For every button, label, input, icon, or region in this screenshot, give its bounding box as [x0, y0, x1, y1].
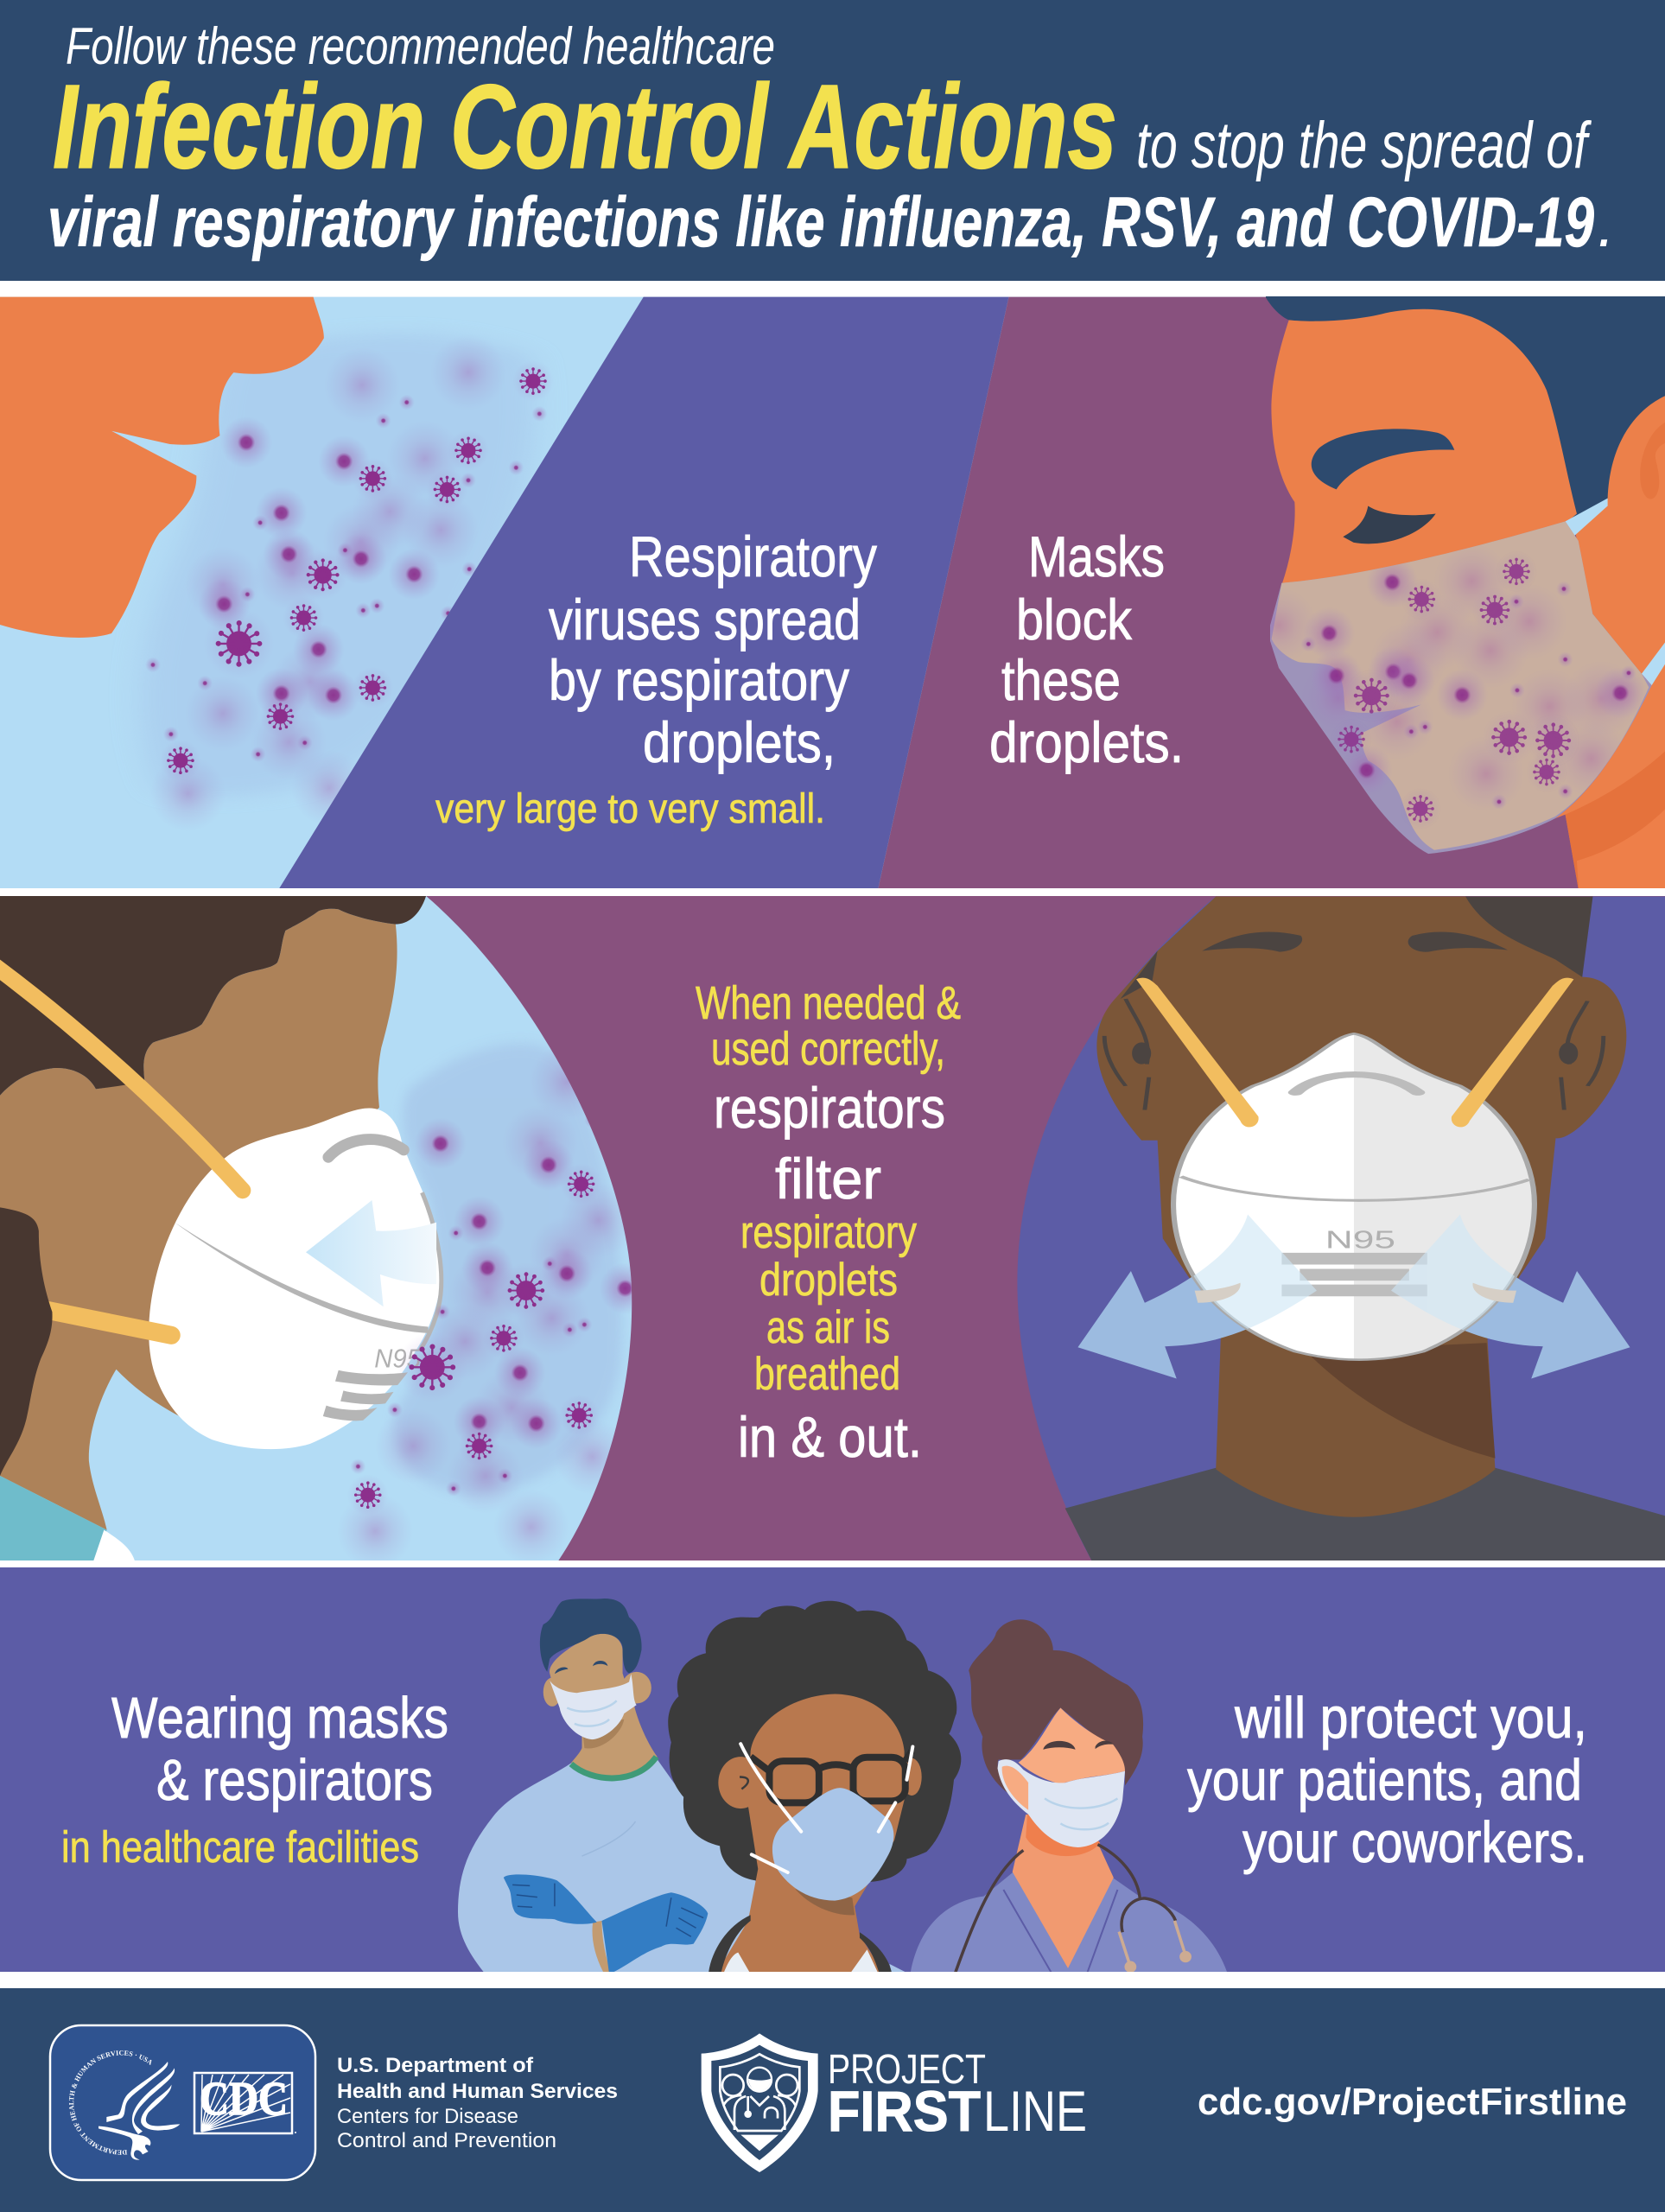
- text: respiratory viruses: Respiratory: [629, 524, 877, 588]
- icon: front-view N95 respirator: [1077, 1033, 1630, 1378]
- text: Project Firstline wordmark: FIRST: [828, 2079, 981, 2143]
- icon: worker three: [910, 1619, 1228, 1974]
- text: wearing masks: [111, 1686, 448, 1813]
- icon: HHS and CDC logo: DEPARTMENT OF HEALTH & HUMAN SERVICES · USA: [69, 2050, 152, 2155]
- icon: droplet haze: [337, 1044, 636, 1569]
- text: will protect you: will protect you,: [1234, 1686, 1587, 1751]
- panel: respirators filter droplets: [0, 894, 1665, 1569]
- text: department names: [337, 2054, 618, 2152]
- icon: head and neck: [1096, 897, 1626, 1517]
- text: department names: Centers for Disease: [337, 2105, 518, 2128]
- icon: surgical mask with trapped droplets: [1241, 521, 1652, 854]
- subtitle period: .: [1598, 191, 1615, 260]
- illustration: right person front view: [1017, 897, 1665, 1560]
- text: respiratory droplets: as air is: [766, 1302, 890, 1353]
- icon: hair: [0, 894, 427, 1096]
- text: department names: Health and Human Services: [337, 2080, 618, 2103]
- text: masks block droplets: Masks: [1028, 524, 1165, 588]
- text: in and out: in & out.: [738, 1405, 922, 1469]
- icon: left face profile: [0, 297, 324, 638]
- title: Infection Control Actions: [53, 60, 1117, 194]
- text: droplet sizes: very large to very small.: [435, 786, 825, 832]
- illustration: coughing face and droplets: [0, 297, 1665, 893]
- icon: shirt: [1065, 1468, 1665, 1560]
- text: website: cdc.gov/ProjectFirstline: [1198, 2081, 1627, 2123]
- footer: [0, 1988, 1665, 2212]
- text: Project Firstline wordmark: LINE: [983, 2079, 1087, 2143]
- text: respiratory viruses: droplets,: [643, 710, 836, 774]
- text: masks block droplets: droplets.: [989, 710, 1184, 774]
- text: department names: Control and Prevention: [337, 2129, 556, 2152]
- icon: hair: [1465, 897, 1593, 977]
- arrow: air inward: [306, 1200, 436, 1306]
- text: masks block droplets: these: [1001, 648, 1121, 712]
- text: respiratory droplets: [740, 1207, 917, 1400]
- icon: yellow upper strap: [0, 967, 243, 1191]
- icon: worker one: [458, 1599, 766, 1974]
- icon: front-view N95 respirator: N95: [1325, 1225, 1395, 1254]
- icon: side-view N95 respirator: N95: [374, 1344, 421, 1373]
- text: wearing masks: & respirators: [156, 1748, 433, 1813]
- text: masks block droplets: [989, 524, 1184, 774]
- text: Project Firstline wordmark: PROJECT: [828, 2047, 986, 2093]
- panel background: [426, 896, 1665, 1560]
- icon: skin: [0, 909, 397, 1530]
- icon: Project Firstline shield: [702, 2033, 818, 2172]
- text: respiratory viruses: viruses spread: [549, 588, 861, 652]
- panel: healthcare workers: [0, 1567, 1665, 1974]
- illustration: left person in side view: [0, 894, 651, 1569]
- icon: yellow lower strap: [45, 1310, 171, 1335]
- arrow: exhaled air right: [1391, 1214, 1630, 1378]
- icon: mask straps: [1566, 499, 1665, 685]
- text: respiratory droplets: respiratory: [740, 1207, 917, 1258]
- intro line: Follow these recommended healthcare: [66, 17, 775, 75]
- text: respirators filter: respirators: [714, 1076, 945, 1140]
- text: respiratory viruses: by respiratory: [549, 648, 849, 712]
- text: respiratory droplets: droplets: [759, 1255, 898, 1306]
- panel: respiratory droplets and masks: [0, 294, 1665, 893]
- icon: HHS eagle: [99, 2062, 180, 2160]
- text: in healthcare facilities: in healthcare facilities: [61, 1822, 419, 1872]
- text: will protect you: your coworkers.: [1242, 1810, 1587, 1875]
- icon: worker two: [668, 1601, 961, 1974]
- icon: face: [1271, 309, 1577, 585]
- text: department names: U.S. Department of: [337, 2054, 534, 2077]
- header banner: [0, 0, 1665, 281]
- text: respirators filter: [714, 1076, 945, 1211]
- icon: eyebrow: [1312, 429, 1454, 489]
- icon: eyebrows: [1202, 931, 1508, 952]
- icon: HHS and CDC logo: [48, 2024, 316, 2181]
- icon: closed eye: [1343, 506, 1436, 543]
- icon: hair: [1266, 294, 1665, 533]
- text: Project Firstline wordmark: [828, 2047, 1087, 2143]
- text: when needed: When needed &: [696, 977, 961, 1029]
- text: when needed: used correctly,: [711, 1023, 945, 1075]
- icon: light blue lens background: [0, 894, 632, 1569]
- text: will protect you: your patients, and: [1187, 1748, 1582, 1813]
- panel background: [0, 1567, 1665, 1972]
- icon: CDC mark: CDC: [200, 2072, 288, 2125]
- arrow: exhaled air left: [1077, 1214, 1317, 1378]
- icon: ear and neck: [1555, 395, 1665, 892]
- icon: right lens background: [1017, 897, 1665, 1560]
- text: wearing masks: Wearing masks: [111, 1686, 448, 1751]
- text: respiratory viruses: [549, 524, 877, 774]
- text: respiratory droplets: breathed: [754, 1349, 900, 1400]
- icon: lower hair: [0, 1207, 53, 1476]
- text: respirators filter: filter: [775, 1147, 881, 1211]
- icon: front respirator straps: [1136, 978, 1573, 1127]
- arrows seen through the respirator: [1077, 1214, 1630, 1378]
- icon: scrub collar: [0, 1476, 107, 1569]
- illustration: masked face with droplets: [1241, 294, 1665, 892]
- illustration: three healthcare workers: [458, 1599, 1228, 1974]
- text: will protect you: [1187, 1686, 1587, 1875]
- icon: side-view N95 respirator: [149, 1109, 442, 1449]
- icon: ear details: [1104, 999, 1604, 1110]
- icon: strap clips: [1195, 1283, 1516, 1303]
- text: masks block droplets: block: [1016, 588, 1133, 652]
- text: when needed: [696, 977, 961, 1075]
- icon: droplets and viruses: [351, 1118, 632, 1509]
